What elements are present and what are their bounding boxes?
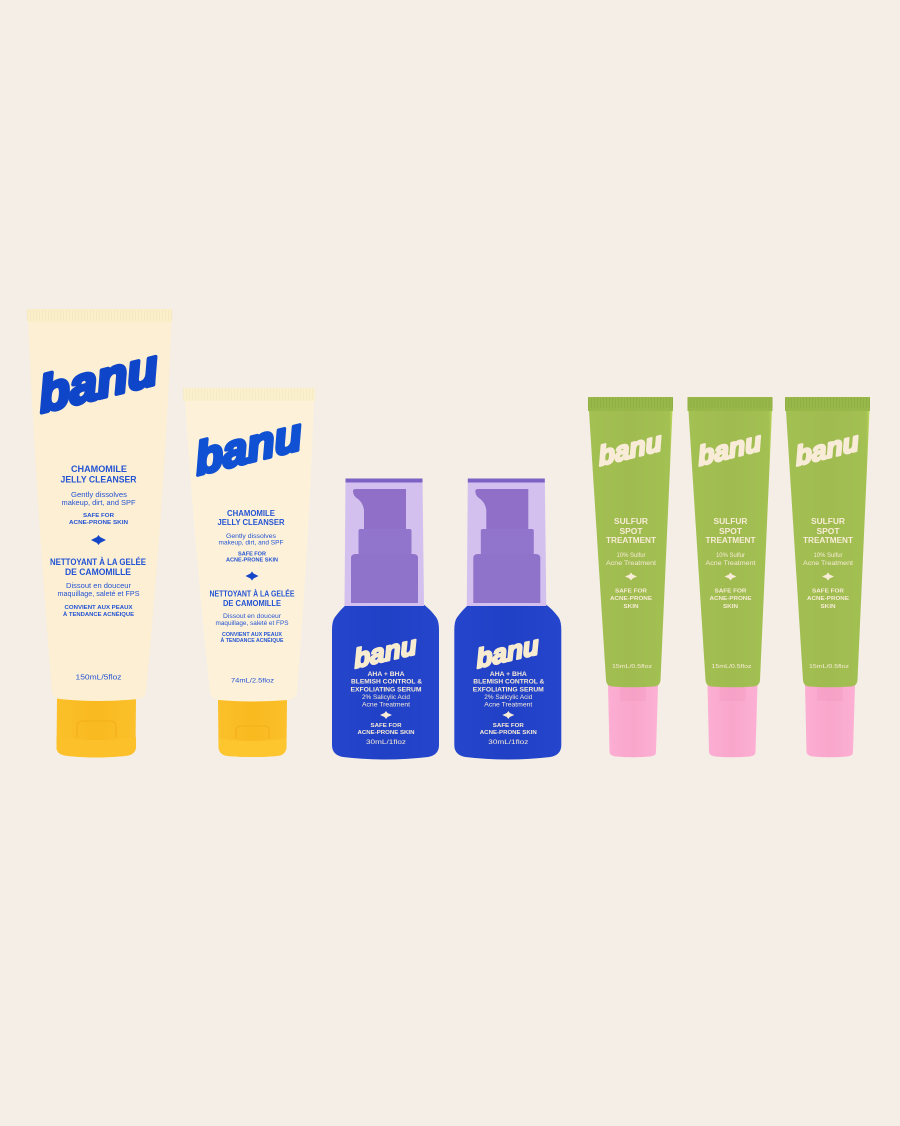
label text: 15mL/0.5floz [712, 664, 752, 670]
tube cap: pink [708, 685, 758, 757]
label text: 2% Salicylic Acid [484, 695, 532, 701]
label text: English: SAFE FOR [83, 513, 115, 519]
label text: English: ACNE-PRONE SKIN [69, 520, 128, 526]
label text [803, 517, 853, 670]
tube body [185, 400, 314, 702]
label text: 15mL/0.5floz [612, 664, 652, 670]
bottle body [454, 604, 561, 760]
logo: banu: banu [475, 630, 540, 674]
label text: English: JELLY CLEANSER [60, 474, 137, 484]
label text: French: NETTOYANT À LA GELÉE [210, 590, 295, 598]
label text: SKIN [820, 604, 836, 610]
label text: TREATMENT [706, 536, 756, 545]
tube body [688, 411, 772, 687]
tube crimp [785, 397, 870, 411]
label text: SPOT [719, 527, 742, 536]
label text: ACNE-PRONE [710, 596, 752, 602]
label text: Acne Treatment [803, 560, 853, 567]
label text: Acne Treatment [362, 702, 410, 708]
label text: ACNE-PRONE [610, 596, 652, 602]
label text: ACNE-PRONE SKIN [358, 730, 414, 736]
label text: SAFE FOR [370, 723, 402, 729]
tube cap: yellow [56, 698, 136, 758]
label text: French: 74mL/2.5floz [231, 678, 274, 684]
tube cap: pink [805, 685, 855, 757]
icon: diamond [246, 572, 258, 580]
label text: 10% Sulfur [716, 552, 745, 559]
label text: French: DE CAMOMILLE [223, 599, 282, 608]
label text [606, 517, 656, 670]
logo: banu: banu [597, 425, 664, 472]
tube crimp [27, 309, 172, 322]
label text [473, 671, 544, 746]
label text: SAFE FOR [812, 588, 845, 594]
label text: English: CHAMOMILE [71, 464, 127, 474]
label text: BLEMISH CONTROL & [473, 678, 544, 686]
tube body [589, 411, 672, 687]
label text: French: 150mL/5floz [76, 674, 122, 682]
label text: French [50, 557, 146, 682]
bottle body [332, 604, 439, 760]
label text: 2% Salicylic Acid [362, 695, 410, 701]
product: small chamomile jelly cleanser tube [183, 388, 315, 757]
label text: French: Dissout en douceur [223, 613, 281, 620]
label text: English: SAFE FOR [238, 552, 266, 558]
label text: SKIN [723, 604, 738, 610]
clear purple overcap [344, 479, 424, 606]
label text: SULFUR [714, 517, 748, 526]
label text: 10% Sulfur [616, 552, 646, 559]
label text: English: JELLY CLEANSER [218, 518, 285, 527]
label text: SULFUR [811, 517, 845, 526]
label text: SAFE FOR [615, 588, 648, 594]
tube crimp [183, 388, 315, 401]
clear purple overcap [467, 479, 546, 606]
pump nozzle [475, 489, 528, 531]
label text: English: Gently dissolves [226, 533, 276, 540]
label text: EXFOLIATING SERUM [473, 686, 544, 694]
label text: AHA + BHA [368, 671, 405, 678]
tube cap: pink [608, 685, 658, 757]
label text: Acne Treatment [606, 560, 656, 567]
label text: English [60, 464, 137, 526]
label text: French: DE CAMOMILLE [65, 567, 131, 577]
label text: TREATMENT [606, 536, 656, 545]
label text: French: Dissout en douceur [66, 583, 132, 590]
label text: French [210, 590, 295, 684]
label text: 10% Sulfur [814, 552, 842, 559]
label text: SPOT [620, 527, 643, 536]
logo: banu: banu [36, 338, 160, 424]
label text: SAFE FOR [493, 723, 525, 729]
product: sulfur spot treatment tube 1 [588, 397, 673, 757]
label text: ACNE-PRONE [807, 596, 849, 602]
label text: French: maquillage, saleté et FPS [58, 591, 140, 598]
tube cap: yellow [218, 700, 287, 757]
label text: English [218, 509, 285, 564]
label text: Acne Treatment [484, 702, 533, 708]
label text: Acne Treatment [706, 560, 756, 567]
label text: English: ACNE-PRONE SKIN [226, 558, 278, 564]
label text: EXFOLIATING SERUM [350, 686, 422, 694]
product: sulfur spot treatment tube 3 [785, 397, 870, 757]
product: sulfur spot treatment tube 2 [688, 397, 772, 757]
label text: TREATMENT [803, 536, 853, 545]
product: large chamomile jelly cleanser tube [27, 309, 172, 758]
label text: SKIN [624, 604, 638, 610]
label text [706, 517, 756, 670]
label text: English: makeup, dirt, and SPF [62, 500, 136, 507]
label text: 30mL/1floz [488, 739, 528, 746]
label text: English: Gently dissolves [71, 492, 128, 499]
logo: banu: banu [696, 425, 763, 472]
label text: French: À TENDANCE ACNÉIQUE [220, 636, 284, 644]
tube crimp [688, 397, 772, 411]
product: AHA + BHA serum bottle 1 [332, 478, 439, 760]
label text [350, 671, 422, 746]
label text: SULFUR [614, 517, 648, 526]
logo: banu: banu [794, 425, 861, 472]
label text: BLEMISH CONTROL & [351, 678, 422, 686]
tube body [786, 411, 870, 687]
label text: English: makeup, dirt, and SPF [218, 540, 284, 546]
icon: diamond [91, 535, 106, 545]
label text: SAFE FOR [714, 588, 747, 594]
label text: French: CONVIENT AUX PEAUX [222, 632, 283, 638]
label text: French: maquillage, saleté et FPS [216, 620, 288, 627]
label text: French: À TENDANCE ACNÉIQUE [63, 610, 134, 618]
label text: AHA + BHA [490, 671, 527, 678]
label text: French: CONVIENT AUX PEAUX [64, 605, 133, 611]
tube crimp [588, 397, 673, 411]
label text: English: CHAMOMILE [227, 509, 276, 518]
product: AHA + BHA serum bottle 2 [454, 478, 561, 760]
logo: banu: banu [353, 630, 418, 674]
tube body [28, 320, 172, 701]
label text: French: NETTOYANT À LA GELÉE [50, 557, 146, 567]
logo: banu: banu [193, 408, 304, 485]
label text: 30mL/1floz [366, 739, 406, 746]
pump nozzle [353, 489, 406, 531]
label text: ACNE-PRONE SKIN [480, 730, 537, 736]
label text: 15mL/0.5floz [809, 664, 849, 670]
label text: SPOT [816, 527, 840, 536]
